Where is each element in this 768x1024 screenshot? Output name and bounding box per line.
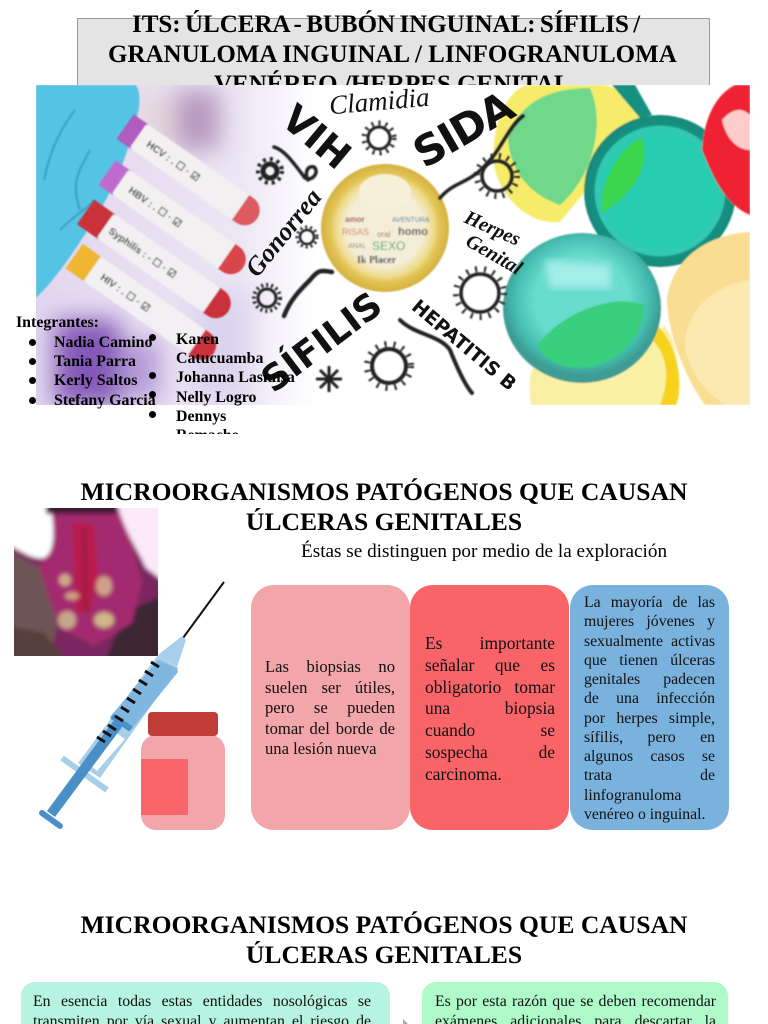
team members: right list: Catucuamba (176, 350, 263, 367)
handwritten disease labels (239, 81, 526, 401)
gold condom with words: oral (377, 230, 391, 239)
text: biopsias: suelen ser útiles, (265, 678, 395, 696)
handwritten disease labels: SÍFILIS (253, 284, 390, 401)
gold condom with words: SEXO (372, 239, 405, 253)
text: carcinoma: una biopsia (425, 698, 555, 718)
team members: right list: Johanna Lasluisa (176, 369, 295, 386)
card: biopsias (251, 585, 410, 830)
text: carcinoma: carcinoma. (425, 764, 502, 784)
names column one: Nadia Camino (54, 334, 152, 351)
gold condom with words: AVENTURA (392, 217, 430, 224)
text: carcinoma: Es importante (425, 633, 555, 653)
integrantes heading: Integrantes: (16, 314, 99, 331)
text: biopsias: Las biopsias no (265, 657, 395, 676)
virus icons (254, 123, 517, 392)
text: herpes: linfogranuloma (584, 786, 681, 804)
section heading two: ÚLCERAS GENITALES (246, 940, 522, 969)
text: transmisión (33, 993, 371, 1024)
text: herpes: sífilis, pero en (584, 729, 715, 746)
gold condom with words: Ik Placer (357, 255, 397, 266)
gold condom with words: ANAL (348, 243, 366, 250)
title (108, 10, 677, 98)
bullets for right list (149, 334, 156, 418)
names column one (29, 334, 156, 409)
glove (36, 85, 140, 298)
section heading one: MICROORGANISMOS PATÓGENOS QUE CAUSAN (81, 477, 687, 506)
title: VENÉREO /HERPES GENITAL (214, 71, 571, 98)
title: ITS: ÚLCERA - BUBÓN INGUINAL: SÍFILIS / (132, 11, 640, 38)
card: exámenes (422, 982, 728, 1024)
card: carcinoma (410, 585, 569, 830)
title: GRANULOMA INGUINAL / LINFOGRANULOMA (108, 41, 677, 68)
handwritten disease labels: Gonorrea (239, 183, 327, 282)
names column one: Kerly Saltos (54, 372, 137, 389)
condom highlight (545, 260, 612, 288)
squiggle lines (274, 116, 523, 393)
gold condom with words: RISAS (342, 227, 369, 237)
text: carcinoma: señalar que es (425, 655, 555, 675)
text: biopsias (265, 657, 395, 758)
condoms (494, 85, 750, 405)
section heading one: ÚLCERAS GENITALES (246, 507, 522, 536)
gold condom with words: homo (398, 226, 428, 238)
test tubes: HBV : . ☐ · ☑ (126, 185, 183, 230)
handwritten disease labels: HEPATITIS B (407, 295, 520, 395)
text: biopsias: una lesión nueva (265, 739, 377, 758)
arrow (403, 1019, 408, 1024)
hero collage image (36, 85, 750, 405)
text: herpes: La mayoría de las (584, 594, 715, 611)
text: carcinoma: cuando se (425, 720, 555, 740)
section heading two (80, 910, 688, 969)
text: exámenes: Es por esta razón que se deben recomendar (435, 993, 716, 1010)
text: biopsias: pero se pueden (265, 698, 395, 717)
team members: right list: Dennys (176, 408, 226, 425)
section heading one (80, 477, 688, 536)
text: herpes: genitales padecen (584, 671, 715, 688)
syringe icon (39, 581, 225, 829)
title box (77, 18, 710, 100)
text: herpes: venéreo o inguinal. (584, 806, 706, 823)
text: herpes (584, 594, 715, 823)
subheading: Éstas se distinguen por medio de la exploración (301, 541, 667, 562)
text: herpes: que tienen úlceras (584, 652, 715, 669)
handwritten disease labels: Genital (462, 230, 526, 280)
text: herpes: mujeres jóvenes y (584, 613, 715, 630)
text: herpes: de una infección (584, 690, 715, 707)
team members: right list (176, 331, 295, 434)
handwritten disease labels: VIH (273, 96, 359, 178)
card: herpes (570, 585, 729, 830)
test tubes: HCV : . ☐ · ☑ (144, 139, 201, 184)
test tubes: Syphilis : - ☐ · ☑ (106, 226, 178, 281)
text: herpes: por herpes simple, (584, 710, 715, 726)
section heading two: MICROORGANISMOS PATÓGENOS QUE CAUSAN (81, 910, 687, 939)
text: transmisión: En esencia todas estas entidades nosológicas se (33, 993, 371, 1010)
text: biopsias: tomar del borde de (265, 718, 395, 738)
handwritten disease labels: Herpes (460, 206, 524, 251)
names column one: Stefany Garcia (54, 392, 156, 409)
team members: left list (16, 314, 156, 409)
gold condom with words: amor (345, 215, 365, 224)
text: exámenes (435, 993, 716, 1024)
team members: right list: Nelly Logro (176, 389, 256, 406)
clinical photo (14, 508, 158, 656)
names column one: Tania Parra (54, 353, 136, 370)
text: herpes: trata de (584, 767, 715, 784)
test tubes (66, 114, 266, 366)
gold condom with words (321, 164, 449, 292)
text: carcinoma (425, 633, 555, 784)
text: herpes: algunos casos se (584, 748, 715, 765)
text: carcinoma: sospecha de (425, 742, 555, 762)
text: carcinoma: obligatorio tomar (425, 677, 555, 697)
card: transmisión (21, 982, 390, 1024)
test tubes: HIV : . ☐ · ☑ (98, 272, 152, 315)
medicine bottle icon (141, 712, 225, 830)
text: herpes: sexualmente activas (584, 632, 715, 650)
team members: right list: Karen (176, 331, 219, 348)
